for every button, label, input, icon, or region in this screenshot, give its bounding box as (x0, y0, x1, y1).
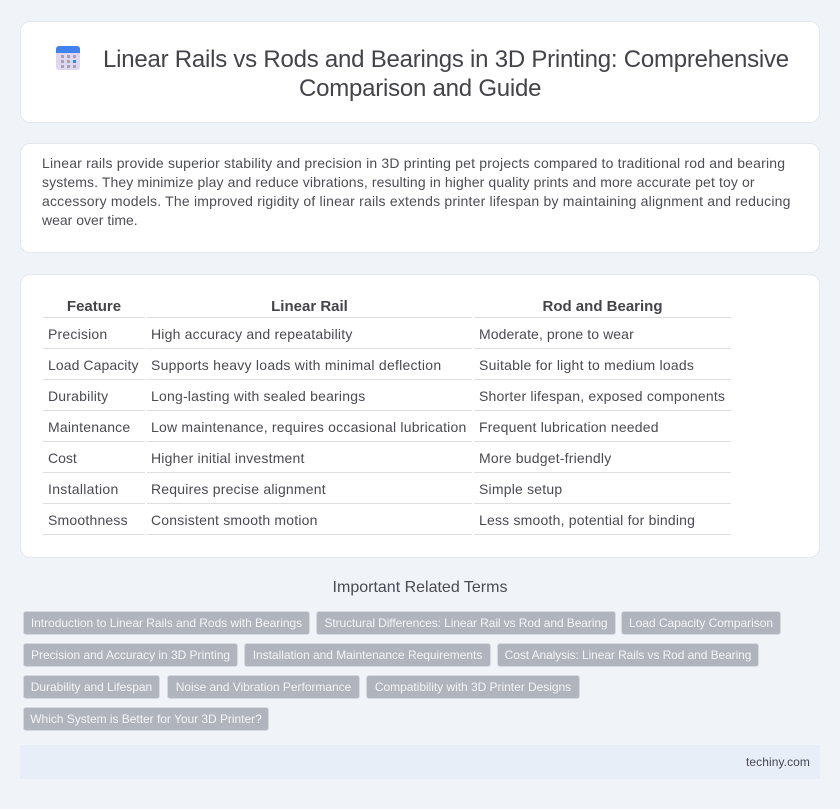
comparison table: Maintenance (48, 419, 130, 435)
comparison table: Low maintenance, requires occasional lubrication (151, 419, 466, 435)
comparison table: Cost (48, 450, 77, 466)
comparison table: Simple setup (479, 481, 562, 497)
related term tags: Durability and Lifespan (31, 680, 152, 694)
comparison table: More budget-friendly (479, 450, 611, 466)
comparison table: Feature (67, 298, 121, 315)
intro text: systems. They minimize play and reduce vibrations, resulting in higher quality prints and more accurate pet toy or (42, 174, 755, 190)
title: Linear Rails vs Rods and Bearings in 3D Printing: Comprehensive (103, 46, 789, 73)
title: Comparison and Guide (299, 75, 541, 102)
related term tags: Cost Analysis: Linear Rails vs Rod and Bearing (505, 648, 751, 662)
footer bar (20, 745, 820, 779)
related term tags: Load Capacity Comparison (629, 616, 773, 630)
comparison table: Rod and Bearing (542, 298, 662, 315)
comparison table: Higher initial investment (151, 450, 305, 466)
comparison table: Requires precise alignment (151, 481, 326, 497)
related term tags: Noise and Vibration Performance (176, 680, 351, 694)
intro text: wear over time. (42, 212, 138, 228)
title (103, 46, 789, 102)
comparison table: Frequent lubrication needed (479, 419, 659, 435)
comparison table: Installation (48, 481, 119, 497)
header panel (20, 21, 820, 123)
related terms heading: Important Related Terms (333, 579, 507, 596)
comparison table: Durability (48, 388, 108, 404)
related term tags: Compatibility with 3D Printer Designs (375, 680, 571, 694)
intro text: Linear rails provide superior stability and precision in 3D printing pet projects compared to traditional rod and bearing (42, 155, 785, 171)
footer source: techiny.com (746, 755, 810, 769)
comparison table: Load Capacity (48, 357, 139, 373)
intro panel (20, 143, 820, 253)
comparison table: Consistent smooth motion (151, 512, 318, 528)
comparison table: Smoothness (48, 512, 128, 528)
related term tags: Introduction to Linear Rails and Rods with Bearings (31, 616, 302, 630)
related term tags: Installation and Maintenance Requirements (253, 648, 482, 662)
comparison table: Less smooth, potential for binding (479, 512, 695, 528)
intro text (42, 155, 791, 228)
comparison table: High accuracy and repeatability (151, 326, 353, 342)
comparison table (43, 298, 731, 535)
comparison table: Linear Rail (271, 298, 348, 315)
comparison table: Precision (48, 326, 107, 342)
comparison table: Shorter lifespan, exposed components (479, 388, 725, 404)
icon: calendar (56, 46, 80, 70)
related term tags (23, 611, 781, 731)
related term tags: Which System is Better for Your 3D Printer? (30, 712, 262, 726)
intro text: accessory models. The improved rigidity of linear rails extends printer lifespan by maintaining alignment and reducing (42, 193, 791, 209)
comparison table: Suitable for light to medium loads (479, 357, 694, 373)
comparison table: Moderate, prone to wear (479, 326, 634, 342)
related term tags: Precision and Accuracy in 3D Printing (31, 648, 230, 662)
related term tags: Structural Differences: Linear Rail vs Rod and Bearing (324, 616, 608, 630)
comparison table: Supports heavy loads with minimal deflection (151, 357, 441, 373)
comparison table: Long-lasting with sealed bearings (151, 388, 365, 404)
table panel (20, 274, 820, 558)
